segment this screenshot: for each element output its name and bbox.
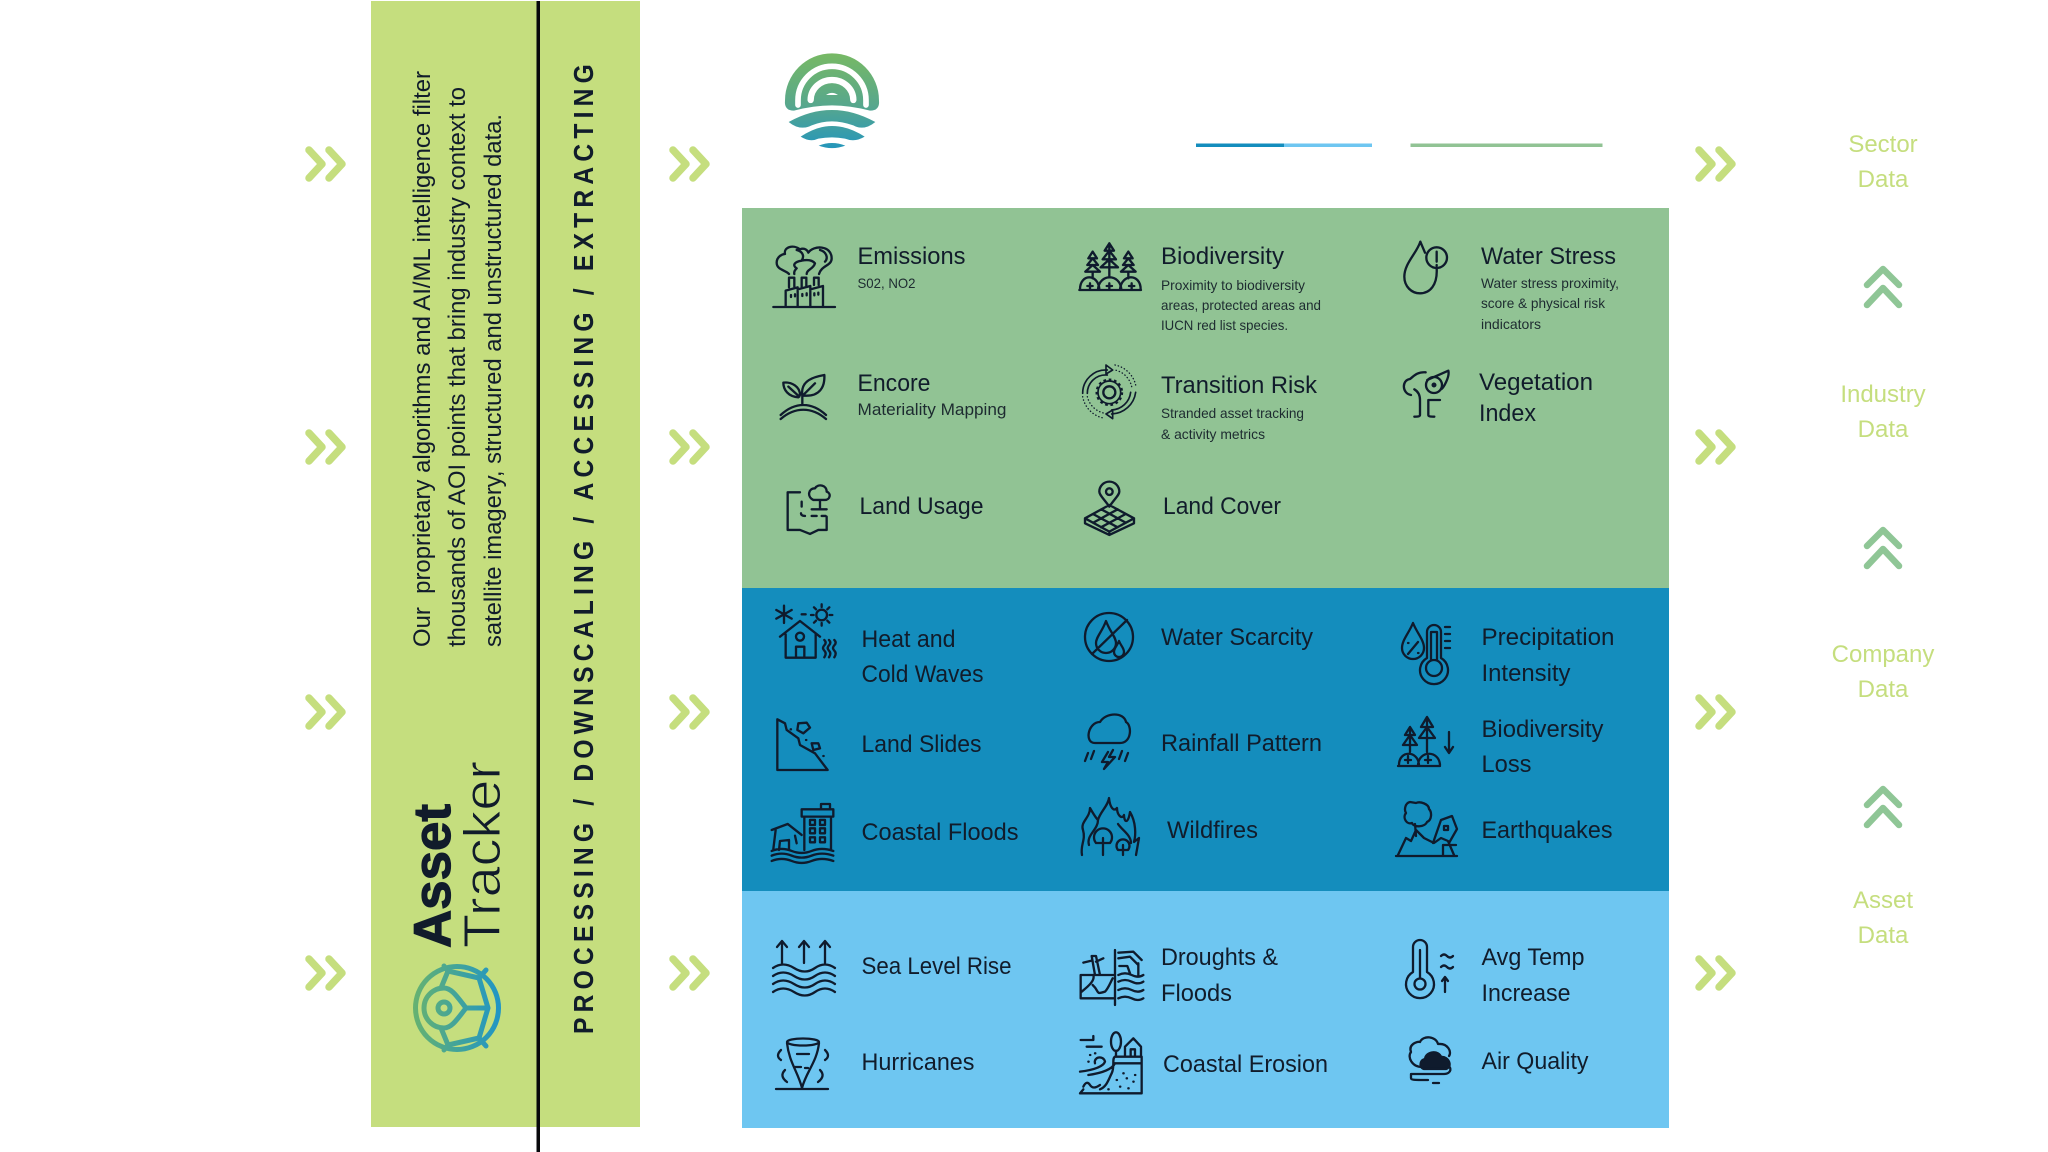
icon: top logo	[785, 53, 879, 148]
label: sector data	[1848, 131, 1918, 193]
item: sea level rise: Sea Level Rise	[862, 953, 1012, 980]
item: land cover	[1085, 482, 1281, 535]
item: droughts and floods	[1081, 944, 1278, 1007]
divider line	[536, 1, 540, 1152]
item: encore: Materiality Mapping	[858, 400, 1006, 419]
description text: satellite imagery, structured and unstructured data.	[480, 114, 507, 647]
item: water scarcity	[1085, 613, 1313, 661]
item: biodiversity loss: Loss	[1482, 751, 1532, 778]
label: asset data: Data	[1858, 922, 1909, 949]
item: rainfall pattern	[1085, 714, 1322, 769]
item: land slides	[777, 719, 982, 770]
label: sector data: Data	[1858, 166, 1909, 193]
item: air quality	[1410, 1037, 1588, 1083]
item: hurricanes: Hurricanes	[862, 1049, 974, 1076]
panel: chronic physical risks	[742, 891, 1669, 1128]
arrows: left column	[309, 150, 342, 987]
item: earthquakes: Earthquakes	[1482, 817, 1612, 844]
icon: asset tracker logo	[416, 966, 498, 1050]
item: water stress: Water stress proximity,	[1481, 275, 1619, 291]
item: biodiversity: areas, protected areas and	[1161, 297, 1321, 313]
legend bars	[1196, 144, 1602, 147]
label: company data	[1832, 641, 1934, 703]
arrow: up chevrons 3	[1867, 789, 1899, 825]
item: biodiversity loss	[1398, 716, 1604, 778]
item: sea level rise	[773, 941, 1012, 996]
description text: Our proprietary algorithms and AI/ML intelligence filter	[409, 71, 436, 647]
description text: thousands of AOI points that bring industry context to	[444, 87, 471, 647]
item: water scarcity: Water Scarcity	[1161, 624, 1313, 651]
item: coastal floods: Coastal Floods	[862, 819, 1018, 846]
label: industry data: Data	[1858, 416, 1909, 443]
item: biodiversity: Biodiversity	[1161, 243, 1284, 270]
panel: environmental indicators	[742, 208, 1669, 588]
asset tracker wordmark: Asset	[404, 804, 462, 948]
item: rainfall pattern: Rainfall Pattern	[1161, 730, 1322, 757]
item: precipitation intensity	[1402, 623, 1614, 687]
item: transition risk: Stranded asset tracking	[1161, 405, 1304, 421]
panel: asset tracker column	[371, 1, 640, 1152]
item: average temperature increase: Increase	[1482, 980, 1570, 1007]
item: encore: Encore	[858, 370, 930, 397]
item: biodiversity loss: Biodiversity	[1482, 716, 1604, 743]
arrows: middle column	[673, 150, 706, 987]
label: industry data: Industry	[1840, 381, 1926, 408]
item: biodiversity: IUCN red list species.	[1161, 317, 1288, 333]
label: industry data	[1840, 381, 1926, 443]
item: emissions	[773, 243, 966, 307]
item: land usage: Land Usage	[860, 493, 984, 520]
item: hurricanes	[776, 1038, 974, 1089]
item: vegetation index	[1404, 369, 1593, 427]
label: asset data	[1853, 887, 1913, 949]
item: transition risk: & activity metrics	[1161, 426, 1265, 442]
label: sector data: Sector	[1848, 131, 1918, 158]
vertical process heading: PROCESSING / DOWNSCALING / ACCESSING / EXTRACTING	[568, 64, 599, 1034]
item: average temperature increase: Avg Temp	[1482, 944, 1584, 971]
item: wildfires: Wildfires	[1167, 817, 1258, 844]
arrow: up chevrons 1	[1867, 269, 1899, 305]
item: air quality: Air Quality	[1482, 1048, 1588, 1075]
item: heat and cold waves: Heat and	[862, 626, 956, 653]
arrow: up chevrons 2	[1867, 530, 1899, 566]
description text	[409, 71, 507, 647]
asset tracker wordmark	[404, 761, 512, 948]
item: coastal erosion: Coastal Erosion	[1163, 1051, 1328, 1078]
item: droughts and floods: Floods	[1161, 980, 1232, 1007]
item: transition risk: Transition Risk	[1161, 372, 1318, 399]
item: vegetation index: Vegetation	[1479, 369, 1593, 396]
item: droughts and floods: Droughts &	[1161, 944, 1278, 971]
label: asset data: Asset	[1853, 887, 1913, 914]
item: heat and cold waves: Cold Waves	[862, 661, 984, 688]
asset tracker wordmark: Tracker	[454, 761, 512, 948]
item: precipitation intensity: Intensity	[1482, 660, 1570, 687]
item: earthquakes	[1396, 802, 1612, 856]
item: water stress: indicators	[1481, 316, 1541, 332]
item: coastal erosion	[1080, 1032, 1328, 1093]
item: emissions: S02, NO2	[858, 275, 916, 291]
item: biodiversity	[1079, 243, 1321, 333]
item: water stress: Water Stress	[1481, 243, 1616, 270]
item: emissions: Emissions	[858, 243, 966, 270]
item: encore	[781, 370, 1006, 419]
label: company data: Company	[1832, 641, 1934, 668]
arrows: right column	[1699, 150, 1732, 987]
item: land slides: Land Slides	[862, 731, 982, 758]
item: water stress: score & physical risk	[1481, 295, 1606, 311]
item: biodiversity: Proximity to biodiversity	[1161, 277, 1305, 293]
item: land usage	[788, 485, 984, 534]
label: company data: Data	[1858, 676, 1909, 703]
item: transition risk	[1083, 365, 1318, 442]
item: vegetation index: Index	[1479, 400, 1536, 427]
item: heat and cold waves	[776, 604, 984, 688]
item: land cover: Land Cover	[1163, 493, 1281, 520]
item: average temperature increase	[1406, 940, 1584, 1007]
item: water stress	[1404, 242, 1619, 332]
panel: acute physical risks	[742, 588, 1669, 891]
item: coastal floods	[772, 804, 1018, 863]
item: wildfires	[1082, 798, 1258, 855]
item: precipitation intensity: Precipitation	[1482, 624, 1614, 651]
